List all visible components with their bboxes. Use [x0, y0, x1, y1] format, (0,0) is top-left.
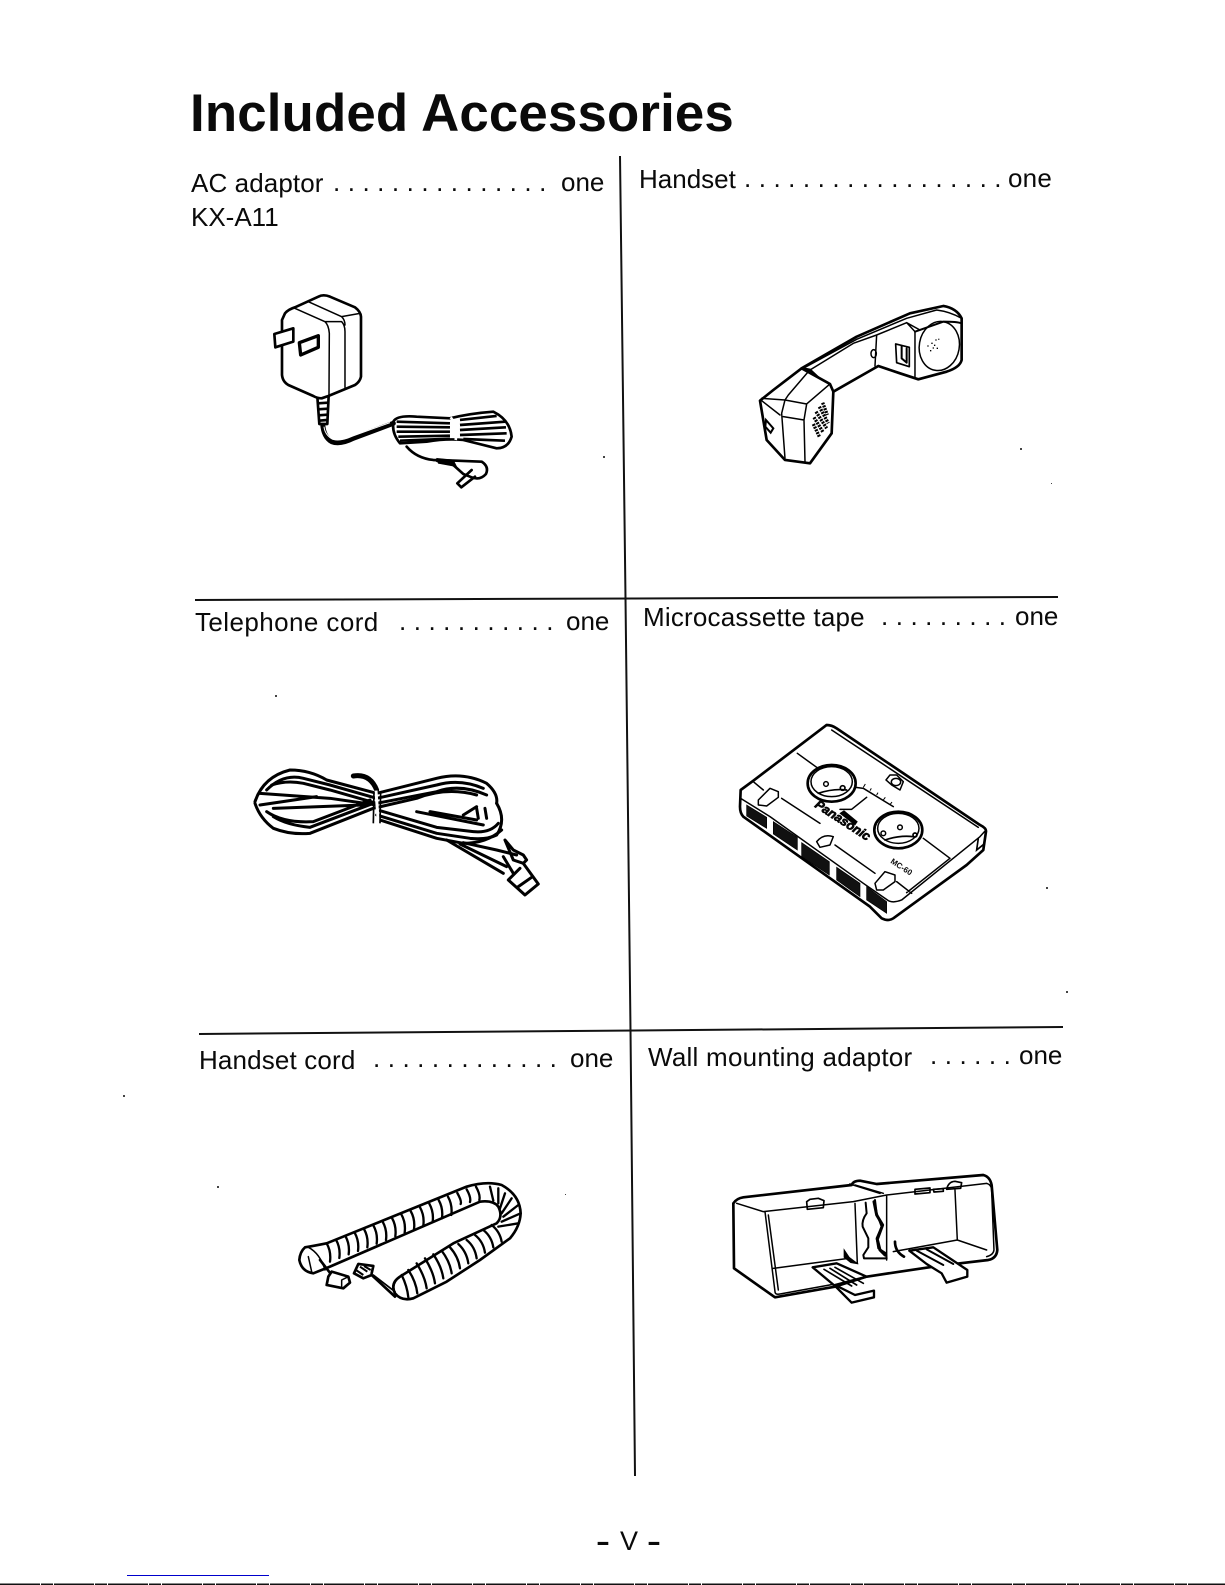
link underline [127, 1575, 269, 1576]
panel: handset [639, 163, 1052, 463]
telephone cord label: one [566, 606, 609, 636]
handset label: Handset [639, 164, 737, 194]
icon: handset [760, 306, 963, 463]
AC adaptor label: KX-A11 [191, 202, 279, 232]
bottom edge line [0, 1584, 1225, 1585]
handset label: .................. [744, 163, 1009, 193]
icon: microcassette tape [740, 725, 986, 920]
page number: - [647, 1526, 661, 1556]
handset cord label: ............. [373, 1043, 564, 1073]
panel: wall mounting adaptor [648, 1040, 1062, 1303]
AC adaptor label: one [561, 167, 604, 197]
handset label: one [1008, 163, 1052, 193]
panel: handset cord [199, 1043, 613, 1299]
icon: microcassette tape: MC-60 [889, 857, 914, 878]
microcassette tape label: one [1015, 601, 1058, 631]
page number: - [596, 1526, 610, 1556]
wall mounting adaptor label: one [1019, 1040, 1062, 1070]
AC adaptor label: ............... [333, 167, 554, 197]
icon: handset cord [299, 1183, 521, 1299]
handset cord label [199, 1043, 613, 1075]
panel: AC adaptor [191, 167, 604, 487]
telephone cord label [195, 606, 609, 637]
handset label [639, 163, 1052, 194]
scan specks [123, 448, 1068, 1195]
handset cord label: Handset cord [199, 1045, 355, 1075]
grid dividers [195, 156, 1063, 1476]
icon: microcassette tape: Panasonic [812, 797, 873, 844]
telephone cord label: ........... [399, 606, 561, 636]
handset cord label: one [570, 1043, 613, 1073]
page number [596, 1526, 661, 1556]
AC adaptor label [191, 167, 604, 232]
icon: wall mounting adaptor [733, 1175, 997, 1303]
panel: telephone cord [195, 606, 609, 895]
icon: telephone cord [255, 770, 538, 895]
wall mounting adaptor label [648, 1040, 1062, 1072]
wall mounting adaptor label: Wall mounting adaptor [648, 1042, 913, 1072]
page number: V [620, 1526, 638, 1556]
title: Included Accessories [190, 84, 734, 143]
wall mounting adaptor label: ...... [930, 1040, 1018, 1070]
microcassette tape label: ......... [881, 601, 1014, 631]
icon: AC adaptor [274, 295, 512, 487]
telephone cord label: Telephone cord [195, 607, 379, 637]
microcassette tape label: Microcassette tape [643, 602, 865, 632]
panel: microcassette tape [643, 601, 1058, 920]
microcassette tape label [643, 601, 1058, 632]
AC adaptor label: AC adaptor [191, 168, 324, 198]
